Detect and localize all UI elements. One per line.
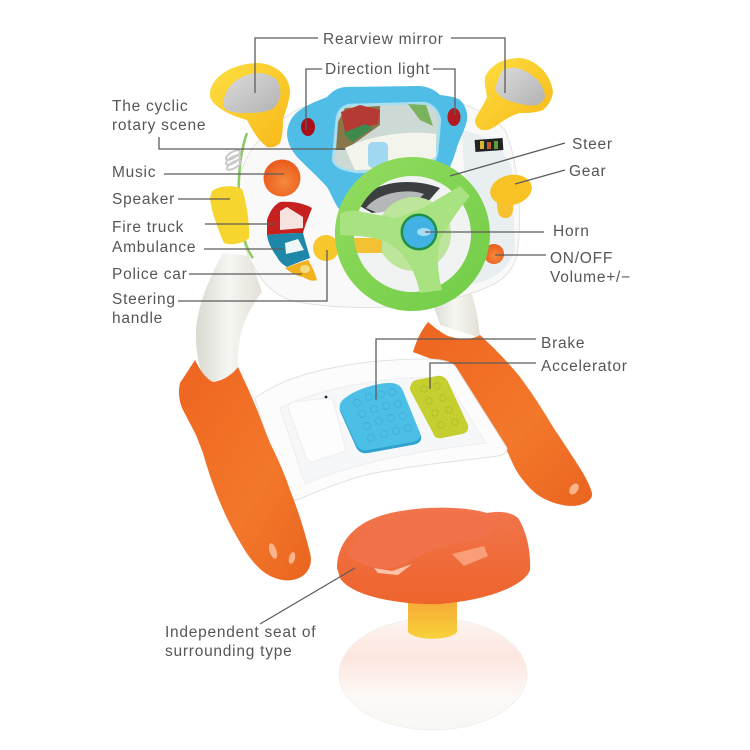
small dot [325, 396, 327, 398]
leader lines [159, 38, 565, 624]
blue horn button [400, 214, 438, 250]
label: Steer: Steer [572, 136, 613, 153]
label: Steering handle: Steering [112, 291, 176, 308]
right mirror [475, 58, 553, 130]
lime accelerator pedal [410, 376, 468, 438]
pedal board [255, 359, 507, 500]
fire truck button [267, 202, 312, 235]
left orange foot [179, 360, 311, 580]
label: Police car: Police car [112, 266, 188, 283]
label: The cyclic rotary scene: rotary scene [112, 117, 206, 134]
steering wheel [335, 157, 490, 311]
yellow steering handle [313, 235, 339, 261]
label: Speaker: Speaker [112, 191, 175, 208]
music button [264, 160, 300, 196]
yellow speaker [210, 186, 249, 244]
police car button [285, 260, 317, 281]
left mirror [210, 63, 290, 147]
illustration: toy driving console [179, 58, 592, 730]
label: Steering handle: handle [112, 310, 163, 327]
left support arm [196, 253, 262, 385]
label: Gear: Gear [569, 163, 606, 180]
dashboard sticker [475, 138, 503, 152]
label: Brake: Brake [541, 335, 585, 352]
blue dashboard frame with rotary scene [287, 86, 467, 210]
label: Horn: Horn [553, 223, 590, 240]
label: Fire truck: Fire truck [112, 219, 184, 236]
label: The cyclic rotary scene: The cyclic [112, 98, 188, 115]
label: Music: Music [112, 164, 156, 181]
seat post [408, 600, 457, 639]
red direction lights [301, 108, 460, 136]
steering console body [225, 94, 519, 308]
label: Accelerator: Accelerator [541, 358, 628, 375]
label: ON/OFF Volume: Volume+/− [550, 269, 631, 286]
vehicle buttons panel [267, 202, 317, 281]
label: Ambulance: Ambulance [112, 239, 196, 256]
label: ON/OFF Volume: ON/OFF [550, 250, 613, 267]
speaker cord [225, 148, 242, 172]
right orange foot [413, 322, 592, 506]
on/off volume knob [484, 244, 504, 264]
white pedal [288, 398, 346, 462]
label: Independent seat of surrounding type: Independent seat of [165, 624, 316, 641]
orange seat [337, 508, 530, 604]
ambulance button [267, 233, 310, 267]
right support arm [430, 294, 480, 338]
label: Rearview mirror: Rearview mirror [323, 31, 444, 48]
label: Direction light: Direction light [325, 61, 430, 78]
blue brake pedal [340, 383, 421, 453]
seat base [339, 618, 527, 730]
label: Independent seat of surrounding type: surrounding type [165, 643, 292, 660]
gear knob [487, 171, 535, 218]
